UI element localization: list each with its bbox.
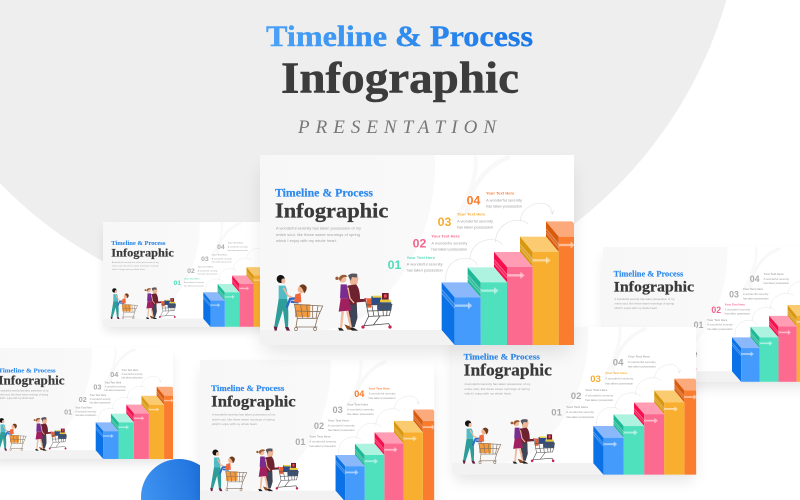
slide: left middle (no highlight): has taken possession	[90, 402, 111, 405]
slide: right lower (step 03 highlighted): which I enjoy with my whole heart.	[464, 392, 512, 396]
slide: left upper (step 01 highlighted): 04	[217, 244, 225, 251]
slide: right upper (step 02 highlighted): Your Text Here	[763, 272, 784, 276]
slide: right lower (step 03 highlighted): A wonderful serenity has taken possession of my	[464, 382, 531, 386]
slide: right upper (step 02 highlighted): A wonderful serenity	[743, 292, 769, 296]
step 01: has taken possession	[407, 268, 443, 273]
step 02: has taken possession	[431, 246, 467, 251]
subtitle: Presentation: PRESENTATION	[297, 117, 497, 138]
slide: left upper (step 01 highlighted): 01	[173, 280, 181, 287]
slide: right lower (step 03 highlighted): Your Text Here	[605, 371, 628, 375]
slide: left middle (no highlight): Your Text Here	[75, 407, 93, 410]
slide: right upper (step 02 highlighted): A wonderful serenity	[763, 277, 790, 281]
slide description: which I enjoy with my whole heart.	[276, 238, 337, 243]
step 01	[388, 256, 442, 272]
slide: left upper (step 01 highlighted): has taken possession	[184, 284, 205, 287]
slide: bottom centre (step 04 highlighted): Your Text Here	[369, 386, 390, 390]
slide: right lower (step 03 highlighted): has taken possession	[605, 381, 634, 385]
step 03: has taken possession	[457, 225, 493, 230]
slide: left middle (no highlight): Timeline & Process	[0, 367, 56, 374]
slide: right lower (step 03 highlighted): Your Text Here	[628, 355, 650, 359]
slide: left upper (step 01 highlighted): A wonderful serenity	[184, 281, 205, 284]
slide: right lower (step 03 highlighted): Your Text Here	[566, 405, 588, 409]
slide: left middle (no highlight): Your Text Here	[122, 369, 139, 372]
slide: right lower (step 03 highlighted): 04	[613, 357, 624, 368]
slide: right lower (step 03 highlighted): Timeline & Process	[464, 351, 540, 361]
slide: left middle (no highlight): has taken possession	[122, 377, 143, 380]
slide: left upper (step 01 highlighted): entire soul, like these sweet mornings of spring	[112, 265, 159, 268]
slide: right lower (step 03 highlighted): A wonderful serenity	[628, 360, 656, 364]
title: Timeline & Process: Timeline & Process	[266, 20, 533, 53]
step 03: A wonderful serenity	[457, 219, 493, 224]
slide: bottom centre (step 04 highlighted): 04	[354, 389, 365, 399]
slide: right lower (step 03 highlighted): A wonderful serenity	[605, 377, 634, 381]
step 01: A wonderful serenity	[407, 262, 443, 267]
slide: left middle (no highlight): A wonderful serenity	[105, 386, 127, 389]
slide: main centre (all steps coloured)	[260, 155, 575, 352]
slide description	[276, 226, 361, 243]
slide: left upper (step 01 highlighted): Your Text Here	[198, 265, 214, 268]
slide: left upper (step 01 highlighted): which I enjoy with my whole heart.	[112, 268, 146, 271]
slide: left upper (step 01 highlighted): Your Text Here	[212, 253, 228, 256]
slide: right upper (step 02 highlighted): has taken possession	[707, 327, 733, 331]
slide: right upper (step 02 highlighted): A wonderful serenity	[707, 323, 733, 327]
slide: left middle (no highlight): entire soul, like these sweet mornings of spring	[0, 393, 49, 396]
slide: bottom centre (step 04 highlighted): Your Text Here	[328, 418, 349, 422]
slide: right upper (step 02 highlighted): 03	[729, 289, 739, 299]
slide: left middle (no highlight): 01	[64, 408, 72, 417]
slide: bottom centre (step 04 highlighted): 01	[295, 437, 305, 447]
slide: right upper (step 02 highlighted): has taken possession	[743, 296, 769, 300]
slide: bottom centre (step 04 highlighted): A wonderful serenity	[309, 440, 337, 444]
slide: left middle (no highlight): Your Text Here	[90, 394, 107, 397]
slide: bottom centre (step 04 highlighted): A wonderful serenity	[347, 407, 374, 411]
slide: right upper (step 02 highlighted): 04	[750, 274, 760, 284]
slide: bottom centre (step 04 highlighted): A wonderful serenity	[328, 424, 355, 428]
slide: right upper (step 02 highlighted): 01	[694, 320, 704, 330]
slide: left middle (no highlight): A wonderful serenity	[90, 398, 112, 401]
background grey circle	[0, 0, 743, 314]
step 01: Your Text Here	[407, 255, 436, 260]
slide: left middle (no highlight): which I enjoy with my whole heart.	[0, 397, 35, 400]
slide: right upper (step 02 highlighted): 02	[711, 305, 721, 315]
slide: left middle (no highlight): Infographic	[0, 373, 65, 387]
slide: left middle (no highlight): 02	[79, 395, 87, 404]
slide: bottom centre (step 04 highlighted): Your Text Here	[309, 435, 331, 439]
slide: left upper (step 01 highlighted): 02	[187, 268, 195, 275]
slide: bottom centre (step 04 highlighted)	[199, 378, 436, 500]
slide: right lower (step 03 highlighted): has taken possession	[628, 365, 656, 369]
slide: right lower (step 03 highlighted): 03	[590, 374, 601, 385]
slide: right lower (step 03 highlighted): A wonderful serenity	[585, 393, 614, 397]
shoppers illustration	[274, 273, 392, 331]
slide: bottom centre (step 04 highlighted): A wonderful serenity has taken possession of my	[212, 413, 276, 417]
slide: left upper (step 01 highlighted): Your Text Here	[184, 277, 200, 280]
slide: right upper (step 02 highlighted): has taken possession	[725, 312, 751, 316]
slide: left middle (no highlight): 04	[110, 370, 118, 379]
step 04: 04	[467, 193, 481, 207]
slide description: A wonderful serenity has taken possession of my	[276, 226, 361, 231]
step 02: Your Text Here	[431, 233, 460, 238]
slide: left upper (step 01 highlighted): A wonderful serenity has taken possession of my	[112, 261, 160, 264]
step 04: A wonderful serenity	[486, 197, 522, 202]
slide: bottom centre (step 04 highlighted): has taken possession	[347, 412, 374, 416]
step 04: has taken possession	[486, 203, 522, 208]
slide: left middle (no highlight): Your Text Here	[105, 381, 122, 384]
step 04	[467, 190, 522, 208]
step 04: Your Text Here	[486, 190, 515, 195]
slide title: Timeline & Process	[275, 188, 374, 200]
slide: right lower (step 03 highlighted): A wonderful serenity	[566, 410, 595, 414]
slide: right upper (step 02 highlighted): has taken possession	[763, 281, 789, 285]
slide: left upper (step 01 highlighted): Infographic	[111, 246, 174, 259]
step 02	[413, 233, 467, 251]
slide: left upper (step 01 highlighted): Your Text Here	[228, 242, 244, 245]
slide description: entire soul, like these sweet mornings of spring	[276, 232, 360, 237]
slide: bottom centre (step 04 highlighted): 02	[314, 421, 324, 431]
step 03: 03	[438, 215, 452, 229]
slide: left upper (step 01 highlighted): A wonderful serenity	[228, 246, 249, 249]
slide: left upper (step 01 highlighted): has taken possession	[212, 261, 232, 264]
slide: right lower (step 03 highlighted): Your Text Here	[585, 388, 608, 392]
slide: bottom centre (step 04 highlighted): which I enjoy with my whole heart.	[212, 422, 258, 426]
heading: Infographic: Infographic	[281, 54, 519, 102]
slide: bottom centre (step 04 highlighted): entire soul, like these sweet mornings of spring	[212, 417, 275, 421]
slide: left upper (step 01 highlighted): 03	[201, 256, 209, 263]
slide: bottom centre (step 04 highlighted): has taken possession	[328, 428, 355, 432]
slide: left middle (no highlight)	[0, 348, 173, 463]
slide: right lower (step 03 highlighted): 01	[551, 408, 563, 419]
slide: right upper (step 02 highlighted): Your Text Here	[707, 318, 728, 322]
slide: left upper (step 01 highlighted): has taken possession	[228, 249, 248, 252]
blue decorative circle	[141, 459, 217, 500]
slide: right upper (step 02 highlighted): Infographic	[614, 279, 694, 295]
slide: left middle (no highlight): 03	[93, 382, 101, 391]
step 01: 01	[388, 258, 402, 272]
step 02: A wonderful serenity	[431, 240, 467, 245]
slide: right lower (step 03 highlighted)	[452, 327, 697, 480]
slide: left middle (no highlight): A wonderful serenity	[75, 411, 97, 414]
slide: right upper (step 02 highlighted): which I enjoy with my whole heart.	[614, 306, 658, 310]
slide: right upper (step 02 highlighted): entire soul, like these sweet mornings of spring	[614, 302, 674, 306]
step 03: Your Text Here	[457, 212, 486, 217]
slide: left middle (no highlight): has taken possession	[75, 414, 97, 417]
slide: bottom centre (step 04 highlighted): Infographic	[211, 394, 296, 411]
slide: bottom centre (step 04 highlighted): Your Text Here	[347, 402, 368, 406]
slide: bottom centre (step 04 highlighted): Timeline & Process	[211, 383, 285, 393]
slide: right lower (step 03 highlighted): 02	[571, 391, 581, 402]
slide: left upper (step 01 highlighted): A wonderful serenity	[198, 269, 218, 272]
slide: right upper (step 02 highlighted): Timeline & Process	[614, 270, 683, 279]
slide: left upper (step 01 highlighted): Timeline & Process	[111, 240, 166, 247]
slide: right lower (step 03 highlighted): has taken possession	[585, 398, 614, 402]
slide: bottom centre (step 04 highlighted): A wonderful serenity	[369, 392, 396, 396]
slide: left middle (no highlight): A wonderful serenity	[122, 373, 143, 376]
slide: right lower (step 03 highlighted): Infographic	[464, 360, 552, 379]
slide: left middle (no highlight): A wonderful serenity has taken possession of my	[0, 390, 49, 393]
slide: right lower (step 03 highlighted): has taken possession	[566, 415, 594, 419]
step 02: 02	[413, 237, 427, 251]
slide: right upper (step 02 highlighted): Your Text Here	[725, 302, 745, 306]
slide: left upper (step 01 highlighted): A wonderful serenity	[212, 257, 233, 260]
slide: bottom centre (step 04 highlighted): 03	[333, 405, 343, 415]
slide: right upper (step 02 highlighted): Your Text Here	[743, 287, 763, 291]
step 03	[438, 212, 493, 230]
slide heading: Infographic	[275, 198, 388, 222]
slide: right upper (step 02 highlighted)	[603, 247, 800, 387]
slide: right lower (step 03 highlighted): entire soul, like these sweet mornings of spring	[464, 387, 530, 391]
slide: bottom centre (step 04 highlighted): has taken possession	[369, 396, 396, 400]
slide: bottom centre (step 04 highlighted): has taken possession	[309, 444, 337, 448]
slide: left upper (step 01 highlighted): has taken possession	[198, 273, 218, 276]
slide: right upper (step 02 highlighted): A wonderful serenity	[725, 307, 751, 311]
slide: left middle (no highlight): has taken possession	[105, 389, 126, 392]
slide: right upper (step 02 highlighted): A wonderful serenity has taken possession of my	[614, 297, 675, 301]
slide: left upper (step 01 highlighted)	[103, 222, 277, 331]
staircase chart with arrows	[442, 203, 575, 345]
